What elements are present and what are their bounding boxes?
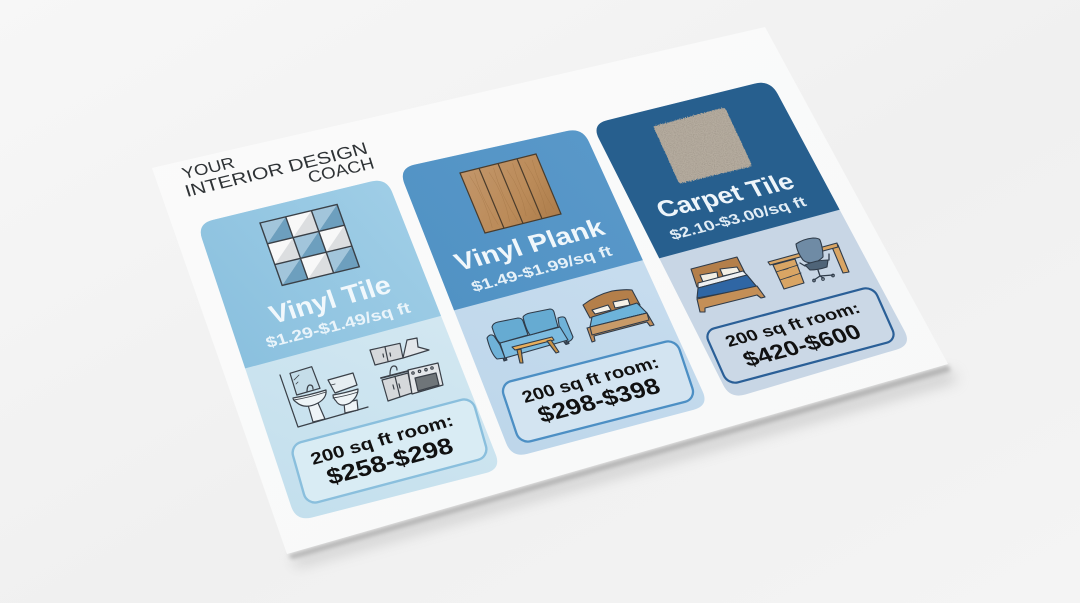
header background bbox=[402, 130, 643, 310]
price per square foot: $1.29-$1.49/sq ft bbox=[264, 300, 413, 352]
icon: bed, blue bbox=[583, 290, 654, 342]
icon: sofa and coffee table bbox=[487, 309, 573, 363]
icon: vinyl tile swatch bbox=[260, 204, 359, 285]
icon: carpet swatch bbox=[654, 108, 751, 183]
brand title: COACH bbox=[306, 155, 376, 187]
callout: room cost bbox=[290, 397, 489, 505]
callout: room cost: $420-$600 bbox=[738, 319, 865, 371]
panel: vinyl tile bbox=[201, 181, 497, 518]
header background bbox=[200, 180, 441, 368]
brand title bbox=[180, 139, 376, 201]
icon: wood plank swatch bbox=[460, 154, 561, 233]
callout: room cost bbox=[500, 339, 696, 444]
icon: kitchen bbox=[370, 338, 443, 401]
paper sheet bbox=[152, 27, 948, 554]
paper shadow bbox=[288, 365, 958, 566]
heading: Carpet Tile bbox=[651, 168, 800, 223]
heading: Vinyl Plank bbox=[450, 214, 609, 277]
panel: vinyl plank bbox=[403, 130, 705, 455]
callout: room cost: $298-$398 bbox=[534, 373, 664, 428]
brand title: YOUR bbox=[180, 155, 237, 183]
icon: bed, navy bbox=[691, 257, 765, 312]
panel: carpet tile bbox=[597, 83, 907, 396]
price per square foot: $2.10-$3.00/sq ft bbox=[667, 194, 809, 244]
callout: room cost: 200 sq ft room: bbox=[519, 353, 662, 407]
icon: bathroom bbox=[280, 367, 368, 427]
icon: desk and chair bbox=[768, 238, 849, 289]
lower panel background bbox=[201, 181, 497, 518]
brand title: INTERIOR DESIGN bbox=[182, 139, 370, 201]
callout: room cost: $258-$298 bbox=[323, 432, 457, 490]
lower panel background bbox=[403, 130, 705, 455]
callout: room cost bbox=[704, 286, 897, 385]
header background bbox=[596, 82, 840, 258]
callout: room cost: 200 sq ft room: bbox=[308, 411, 456, 469]
lower panel background bbox=[597, 83, 907, 396]
price per square foot: $1.49-$1.99/sq ft bbox=[469, 243, 615, 296]
callout: room cost: 200 sq ft room: bbox=[722, 299, 863, 351]
heading: Vinyl Tile bbox=[266, 271, 395, 330]
